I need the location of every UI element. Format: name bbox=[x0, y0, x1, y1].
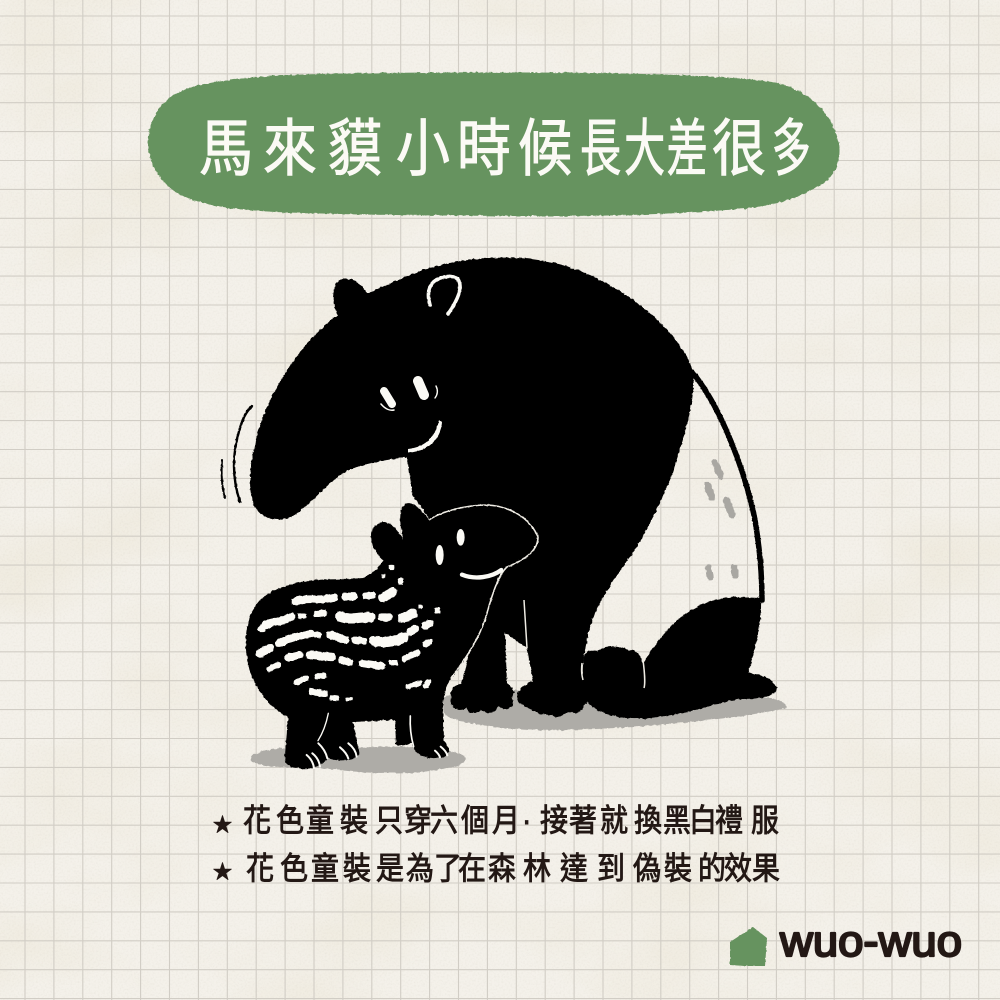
adult tapir white ear bbox=[428, 276, 460, 314]
adult tapir smile bbox=[408, 420, 442, 453]
icon: green house bbox=[730, 927, 767, 966]
ground shadow: baby tapir bbox=[250, 747, 466, 773]
adult tapir toes bbox=[451, 646, 642, 717]
adult tapir body bbox=[250, 258, 694, 715]
baby tapir smile bbox=[462, 570, 501, 577]
green pill bbox=[148, 72, 840, 216]
adult tapir eyes bbox=[381, 381, 437, 410]
adult tapir leg and toe lines bbox=[524, 600, 645, 688]
title text: 馬來貘小時候 bbox=[199, 115, 572, 184]
fact line 2: ★ bbox=[213, 862, 232, 883]
title text: 很 bbox=[712, 115, 766, 184]
adult tapir back outline bbox=[692, 372, 762, 600]
fact line 1: ★ bbox=[213, 815, 232, 836]
baby tapir head outline bbox=[429, 505, 538, 678]
title banner bbox=[148, 72, 840, 216]
facts text bbox=[213, 804, 780, 886]
logo wordmark: wuo-wuo bbox=[779, 917, 962, 966]
title text: 長大差 bbox=[580, 115, 708, 184]
title text bbox=[199, 114, 811, 184]
baby tapir bbox=[246, 503, 538, 769]
title text: 多 bbox=[772, 114, 811, 183]
spots on white rump bbox=[707, 463, 735, 577]
baby tapir stripes bbox=[260, 567, 437, 699]
logo bbox=[730, 917, 962, 966]
ground shadow: adult tapir bbox=[443, 690, 787, 730]
baby tapir eyes bbox=[436, 529, 465, 565]
baby tapir leg and toe lines bbox=[307, 713, 447, 768]
baby tapir body bbox=[246, 503, 538, 769]
fact line 2: 花色童裝是為了在森林達到偽裝的效果 bbox=[246, 852, 780, 886]
motion lines by trunk bbox=[222, 406, 252, 502]
adult tapir bbox=[250, 258, 777, 719]
fact line 1: 花色童裝只穿六個月·接著就換黑白禮服 bbox=[243, 804, 779, 838]
adult tapir hind leg and tail bbox=[582, 597, 777, 719]
